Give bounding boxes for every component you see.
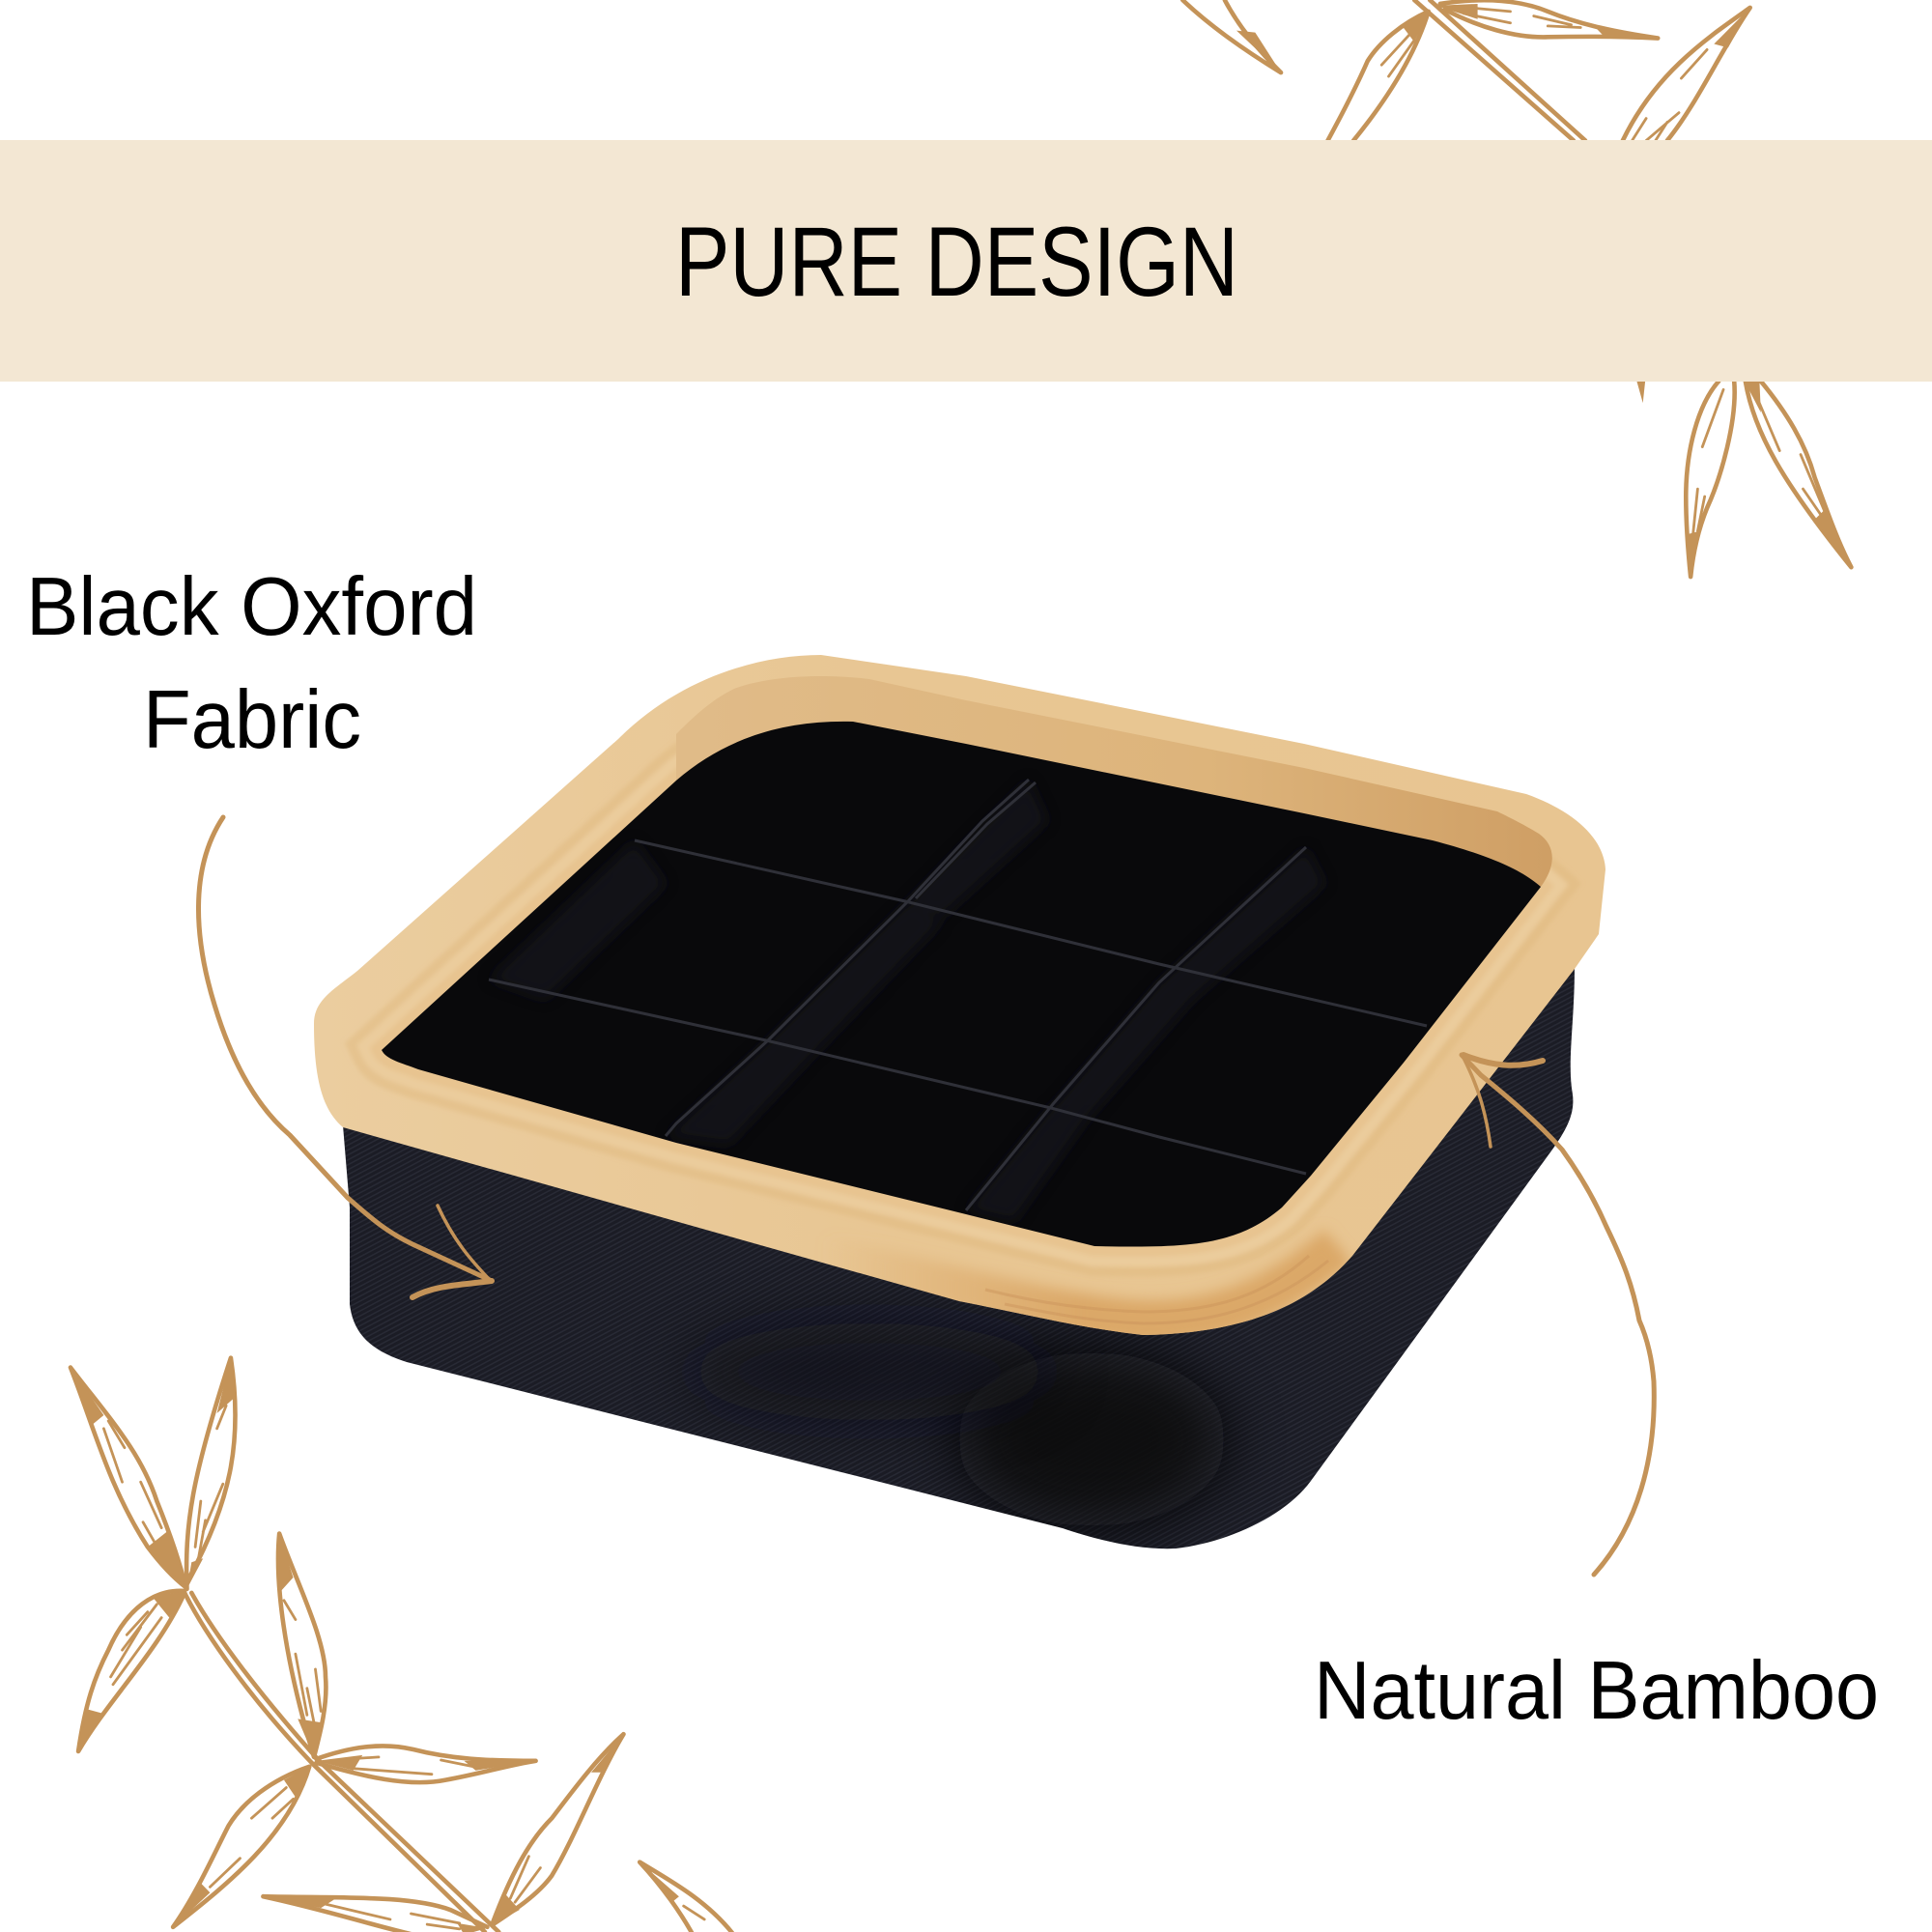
leaf D xyxy=(278,1534,326,1757)
product: bamboo and fabric organizer basket xyxy=(314,655,1605,1548)
title: PURE DESIGN xyxy=(675,207,1238,317)
leaf H xyxy=(263,1896,487,1932)
fabric body xyxy=(343,966,1575,1548)
arrow: to black oxford fabric xyxy=(198,817,492,1297)
arrow: to natural bamboo xyxy=(1462,1055,1654,1575)
leaf I xyxy=(639,1862,732,1932)
label: black oxford fabric: Black Oxford xyxy=(26,561,477,653)
label: black oxford fabric xyxy=(26,561,477,766)
leaf B xyxy=(186,1358,236,1589)
label: natural bamboo: Natural Bamboo xyxy=(1314,1645,1879,1737)
leaf F xyxy=(173,1766,311,1927)
icon: bamboo leaves top right xyxy=(1182,0,1851,577)
label: black oxford fabric: Fabric xyxy=(143,674,361,766)
leaf E xyxy=(316,1746,536,1782)
inner opening with compartments xyxy=(382,722,1541,1247)
inner back face of rim xyxy=(676,676,1552,887)
divider seams xyxy=(489,780,1427,1210)
leaf A xyxy=(71,1368,185,1587)
icon: bamboo leaves bottom left xyxy=(71,1358,732,1932)
bamboo rim xyxy=(314,655,1605,1335)
compartment shading xyxy=(489,780,1325,1222)
leaf C xyxy=(78,1591,186,1751)
header band xyxy=(0,140,1932,382)
stem xyxy=(185,1593,498,1932)
leaf G xyxy=(492,1734,623,1925)
